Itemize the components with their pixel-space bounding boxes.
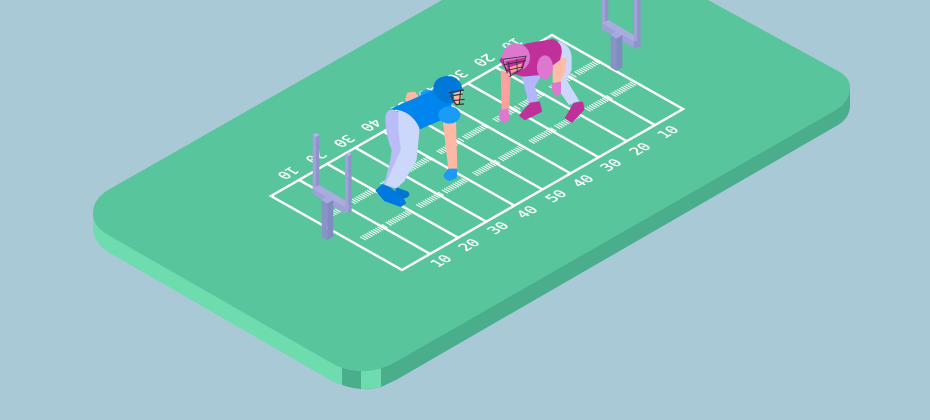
shoulder pad bbox=[537, 55, 553, 79]
yard numbers: near side: 20 bbox=[455, 237, 484, 254]
glove bbox=[444, 169, 457, 180]
player: blue bbox=[377, 76, 465, 206]
jersey bbox=[389, 90, 452, 129]
front leg bbox=[522, 75, 542, 105]
chin bbox=[509, 63, 522, 73]
player: pink bbox=[499, 39, 583, 123]
yard numbers: far side: 30 bbox=[329, 132, 358, 149]
yard numbers: near side: 40 bbox=[569, 173, 598, 190]
platform side: dark bbox=[342, 88, 850, 389]
field lines bbox=[271, 35, 683, 270]
yard numbers: far side: 40 bbox=[414, 83, 443, 100]
yard numbers: far side: 20 bbox=[301, 148, 330, 165]
face mask bbox=[449, 90, 465, 105]
yard numbers: near side: 10 bbox=[427, 253, 456, 270]
front arm bbox=[443, 120, 457, 169]
yard numbers: near side: 50 bbox=[542, 188, 571, 205]
front arm bbox=[501, 70, 511, 110]
yard numbers: far side: 20 bbox=[469, 51, 498, 68]
left shoe bbox=[521, 103, 541, 119]
back shoe bbox=[396, 188, 409, 198]
hash marks: far row bbox=[324, 59, 602, 218]
yard numbers: far side bbox=[273, 35, 526, 181]
hash marks: near row bbox=[360, 81, 638, 240]
back arm bbox=[405, 92, 420, 103]
front glove bbox=[500, 110, 509, 123]
football field markings bbox=[271, 35, 683, 270]
yard numbers: far side: 40 bbox=[356, 116, 385, 133]
forearm bbox=[553, 58, 567, 83]
rear leg bbox=[553, 41, 579, 105]
yard numbers: near side: 20 bbox=[626, 141, 655, 158]
face bbox=[453, 91, 463, 105]
yard numbers: near side: 30 bbox=[484, 220, 513, 237]
front shoe bbox=[377, 185, 405, 206]
yard numbers: far side: 10 bbox=[497, 35, 526, 52]
yard numbers: far side: 10 bbox=[273, 164, 302, 181]
goal post: front bbox=[313, 133, 352, 240]
yard numbers: near side: 10 bbox=[654, 124, 683, 141]
face mask bbox=[503, 56, 527, 77]
shoulder pad bbox=[438, 106, 460, 124]
platform side: light corner strip bbox=[361, 360, 381, 389]
front leg bbox=[385, 110, 419, 188]
yard numbers: far side: 30 bbox=[442, 67, 471, 84]
platform top surface bbox=[93, 0, 850, 371]
yard numbers: near side: 30 bbox=[597, 157, 626, 174]
helmet bbox=[502, 43, 530, 71]
yard numbers: far side: 50 bbox=[385, 99, 414, 116]
back leg bbox=[384, 109, 403, 187]
platform side: light left bbox=[93, 215, 342, 385]
helmet bbox=[433, 76, 463, 103]
goal post: back bbox=[602, 0, 641, 71]
platform bbox=[93, 0, 850, 389]
yard numbers: near side: 40 bbox=[513, 204, 542, 221]
back glove bbox=[552, 82, 560, 96]
face bbox=[505, 57, 526, 75]
right shoe bbox=[566, 103, 583, 121]
yard numbers: near side bbox=[427, 124, 683, 270]
back sleeve bbox=[420, 90, 434, 100]
jersey bbox=[499, 39, 562, 77]
